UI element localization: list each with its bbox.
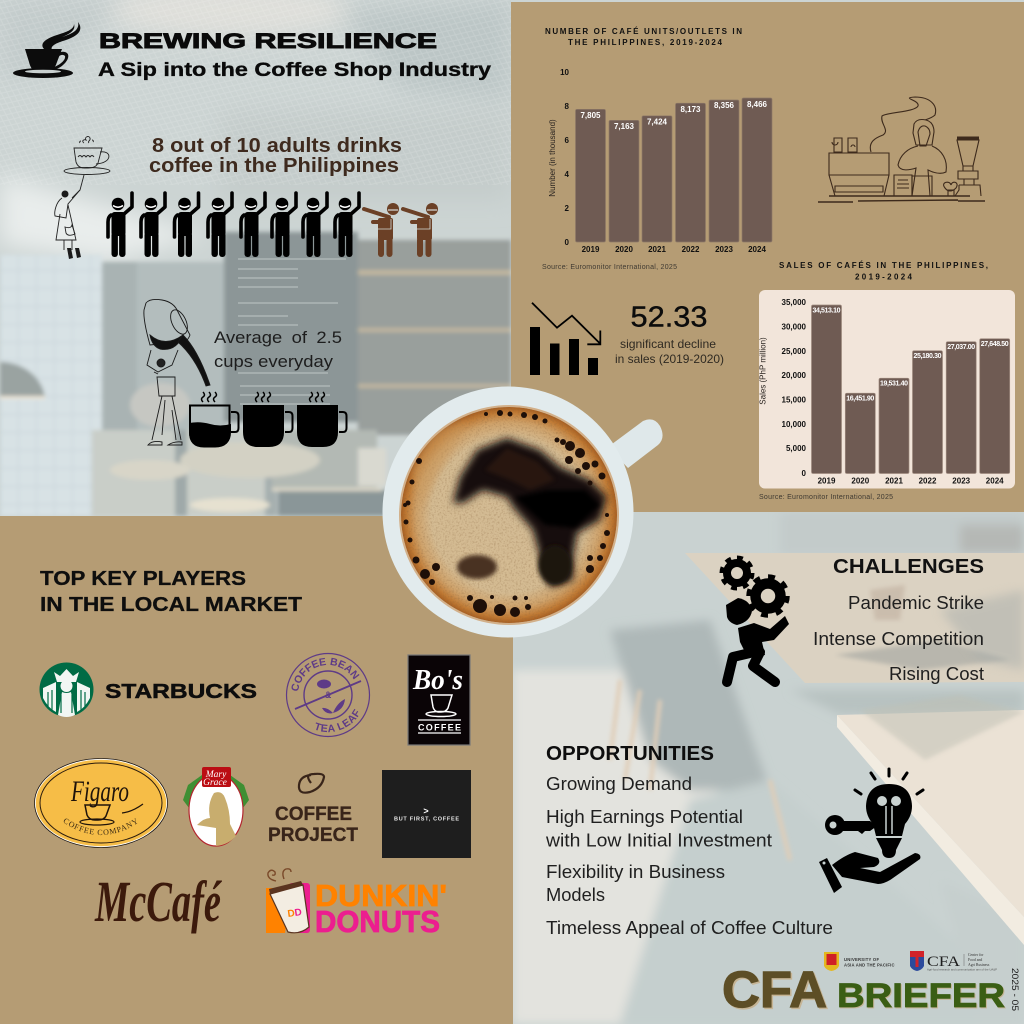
text: 8 out of 10 adults: coffee in the Philippines: [149, 155, 399, 177]
bar chart: cafe sales: Sales (PhP million): [758, 337, 768, 405]
logo: dunkin donuts: [266, 869, 447, 939]
bar chart: cafe units: 2020: [615, 245, 633, 254]
logo: coffee bean and tea leaf: COFFEE BEAN: [292, 658, 360, 691]
text: opportunities list: Timeless Appeal of Coffee Culture: [546, 918, 833, 938]
title: [98, 30, 492, 81]
logo: mary grace: Grace: [203, 778, 227, 788]
text: opportunities list: High Earnings Potential: [546, 807, 743, 827]
bar chart: cafe units: 8,356: [714, 101, 735, 110]
bar chart: cafe units: 2019: [582, 245, 600, 254]
logo: cfa briefer wordmark: BRIEFER: [838, 978, 1006, 1016]
text: opportunities list: Flexibility in Business: [546, 862, 725, 882]
heading: sales of cafes: SALES OF CAFÉS IN THE PHILIPPINES,: [779, 261, 988, 270]
logo: university of asia and the pacific: UNIVERSITY OF: [844, 957, 879, 962]
bar chart: cafe sales: 0: [802, 469, 807, 478]
text: source note: Source: Euromonitor International, 2025: [759, 494, 893, 501]
logo: coffee project: PROJECT: [268, 825, 358, 846]
bar chart: cafe units: 2024: [748, 245, 766, 254]
bar chart: cafe units: 7,163: [614, 122, 635, 131]
bar chart: cafe units: 0: [565, 238, 570, 247]
icon: full cup: [297, 392, 346, 447]
bar chart: cafe units: 2023: [715, 245, 733, 254]
logo: university of asia and the pacific: [824, 952, 894, 971]
bar chart: cafe units: 8,466: [747, 100, 768, 109]
icon: waitress carrying cup: [55, 137, 110, 250]
logo: cfa briefer wordmark: BRIEFER: [837, 977, 1005, 1015]
logo: cfa briefer wordmark: [722, 961, 1006, 1020]
text: opportunities list: with Low Initial Investment: [545, 830, 772, 850]
text: opportunities list: Growing Demand: [546, 774, 692, 794]
text: source note: Source: Euromonitor International, 2025: [542, 264, 677, 271]
bar chart: cafe sales: 25,000: [782, 347, 807, 356]
logo: coffee bean and tea leaf: TEA LEAF: [316, 709, 358, 732]
panel: bottom left panel edge: [511, 516, 513, 1024]
heading: challenges: CHALLENGES: [833, 556, 984, 578]
logo: mccafe: McCafé: [94, 869, 222, 934]
panel: top edge photo strip: [511, 0, 1024, 2]
text: 8 out of 10 adults: [149, 135, 402, 177]
heading: opportunities: OPPORTUNITIES: [546, 743, 714, 765]
text: challenges list: [813, 593, 984, 684]
bar chart: cafe sales: 25,180.30: [914, 353, 942, 360]
bar chart: cafe sales: 20,000: [782, 371, 807, 380]
heading: number of cafe units: NUMBER OF CAFÉ UNITS/OUTLETS IN: [545, 27, 742, 36]
logo: dunkin donuts: D: [287, 908, 296, 920]
heading: number of cafe units: [545, 27, 742, 47]
heading: sales of cafes: [779, 261, 988, 282]
text: challenges list: Rising Cost: [889, 664, 984, 684]
icon: person carrying gears: [722, 558, 789, 682]
text: 52.33 decline: 52.33: [630, 302, 708, 334]
bar chart: cafe units: [548, 68, 772, 254]
icon: lightbulb key and hand: [819, 769, 923, 893]
logo: mary grace: Mary: [205, 770, 227, 780]
logo: coffee bean and tea leaf: [286, 652, 370, 738]
bar chart: cafe sales: 10,000: [782, 420, 807, 429]
bar chart: cafe sales: 2022: [919, 476, 937, 486]
logo: coffee bean and tea leaf: &: [325, 690, 332, 700]
bar chart: cafe sales: 34,513.10: [812, 308, 841, 314]
text: average cups: [214, 328, 342, 371]
bar chart: cafe sales: 15,000: [782, 396, 807, 404]
logo: bo's coffee: COFFEE: [418, 722, 461, 732]
logo: center for food and agri business: Food and: [968, 958, 982, 962]
panel: sales chart card: [759, 290, 1015, 488]
heading: top key players: IN THE LOCAL MARKET: [40, 593, 303, 616]
logo: center for food and agri business: [910, 951, 997, 972]
logo: but first coffee: [382, 770, 471, 858]
bar chart: cafe units: 8,173: [680, 105, 701, 114]
logo: center for food and agri business: Agri-food research and communication arm of the UA&P: [927, 968, 997, 972]
title: A Sip into the Coffee Shop Industry: [98, 60, 492, 81]
logo: starbucks: STARBUCKS: [105, 681, 257, 703]
panel: top left cafe photo background: [0, 0, 511, 516]
logo: cfa briefer wordmark: CFA: [724, 962, 828, 1020]
text: 8 out of 10 adults: 8 out of 10 adults drinks: [152, 135, 402, 157]
logo: cfa briefer wordmark: CFA: [722, 961, 827, 1018]
bar chart: cafe units: 7,424: [647, 118, 668, 126]
logo: but first coffee: >: [423, 806, 429, 816]
logo: but first coffee: BUT FIRST, COFFEE: [394, 816, 459, 822]
text: 52.33 decline: [615, 302, 724, 366]
bar chart: cafe sales: 19,531.40: [880, 380, 908, 388]
icon: eight people drinking coffee: [108, 193, 359, 257]
icon: barista line art: [818, 97, 985, 202]
icon: coffee cup with steam: [13, 22, 80, 78]
heading: top key players: [40, 567, 303, 616]
heading: number of cafe units: THE PHILIPPINES, 2019-2024: [568, 38, 723, 47]
bar chart: cafe sales: 5,000: [786, 444, 807, 453]
bar chart: cafe sales: 2019: [818, 476, 836, 486]
text: 52.33 decline: in sales (2019-2020): [615, 352, 724, 366]
icon: full cup: [243, 392, 292, 447]
logo: figaro coffee company: [34, 758, 168, 848]
bar chart: cafe units: 6: [565, 136, 570, 145]
bar chart: cafe sales: 2020: [851, 476, 870, 486]
logo: center for food and agri business: Center for: [968, 953, 984, 957]
panel: bottom right cafe photo background: [513, 512, 1024, 1024]
text: opportunities list: [545, 774, 833, 938]
text: 52.33 decline: significant decline: [620, 337, 716, 351]
logo: bo's coffee: [408, 655, 470, 745]
bar chart: cafe units: Number (in thousand): [548, 119, 557, 197]
logo: coffee project: COFFEE: [275, 804, 352, 825]
text: issue number: 2025 - 05: [1010, 968, 1020, 1011]
logo: dunkin donuts: DONUTS: [315, 905, 440, 939]
icon: declining sales chart: [530, 303, 600, 375]
bar chart: cafe sales: 2023: [952, 476, 971, 486]
bar chart: cafe units: 2021: [648, 245, 666, 254]
text: average cups: cups everyday: [214, 352, 334, 371]
bar chart: cafe units: 8: [565, 102, 570, 111]
logo: mary grace: [183, 767, 249, 846]
bar chart: cafe units: 2022: [682, 245, 700, 254]
logo: figaro coffee company: Figaro: [70, 775, 129, 808]
bar chart: cafe sales: 27,037.00: [947, 344, 975, 351]
bar chart: cafe units: 2: [565, 204, 570, 213]
text: challenges list: Pandemic Strike: [848, 593, 984, 613]
logo: dunkin donuts: D: [294, 907, 303, 919]
bar chart: cafe units: 4: [565, 170, 570, 179]
bar chart: cafe sales: [758, 298, 1010, 486]
bar chart: cafe units: 7,805: [580, 111, 601, 120]
bar chart: cafe sales: 2024: [986, 476, 1004, 486]
bar chart: cafe sales: 30,000: [782, 322, 807, 332]
logo: dunkin donuts: DUNKIN': [315, 879, 447, 913]
bar chart: cafe sales: 27,648.50: [981, 341, 1009, 348]
title: BREWING RESILIENCE: [99, 30, 437, 53]
logo: bo's coffee: Bo's: [412, 664, 463, 696]
logo: figaro coffee company: COFFEE COMPANY: [64, 818, 138, 836]
logo: center for food and agri business: Agri Business: [968, 963, 990, 967]
text: opportunities list: Models: [546, 885, 605, 905]
icon: half filled cup: [189, 392, 238, 447]
text: challenges list: Intense Competition: [813, 629, 984, 649]
heading: top key players: TOP KEY PLAYERS: [40, 567, 246, 590]
icon: two people not drinking coffee: [364, 203, 438, 257]
logo: starbucks: [40, 662, 257, 717]
text: average cups: Average of 2.5: [214, 328, 342, 347]
bar chart: cafe sales: 16,451.90: [846, 396, 874, 402]
bar chart: cafe units: 10: [560, 68, 570, 77]
logo: university of asia and the pacific: ASIA AND THE PACIFIC: [844, 962, 894, 968]
image: coffee cup top view: [382, 386, 663, 638]
icon: waitress boots and head: [62, 190, 81, 259]
icon: man pouring coffee jug: [144, 299, 210, 445]
logo: coffee project: [268, 774, 358, 846]
bar chart: cafe sales: 2021: [885, 476, 903, 486]
bar chart: cafe sales: 35,000: [782, 298, 807, 307]
logo: center for food and agri business: CFA: [927, 954, 960, 970]
icon: three coffee cups: [189, 392, 346, 447]
heading: sales of cafes: 2019-2024: [855, 272, 913, 282]
